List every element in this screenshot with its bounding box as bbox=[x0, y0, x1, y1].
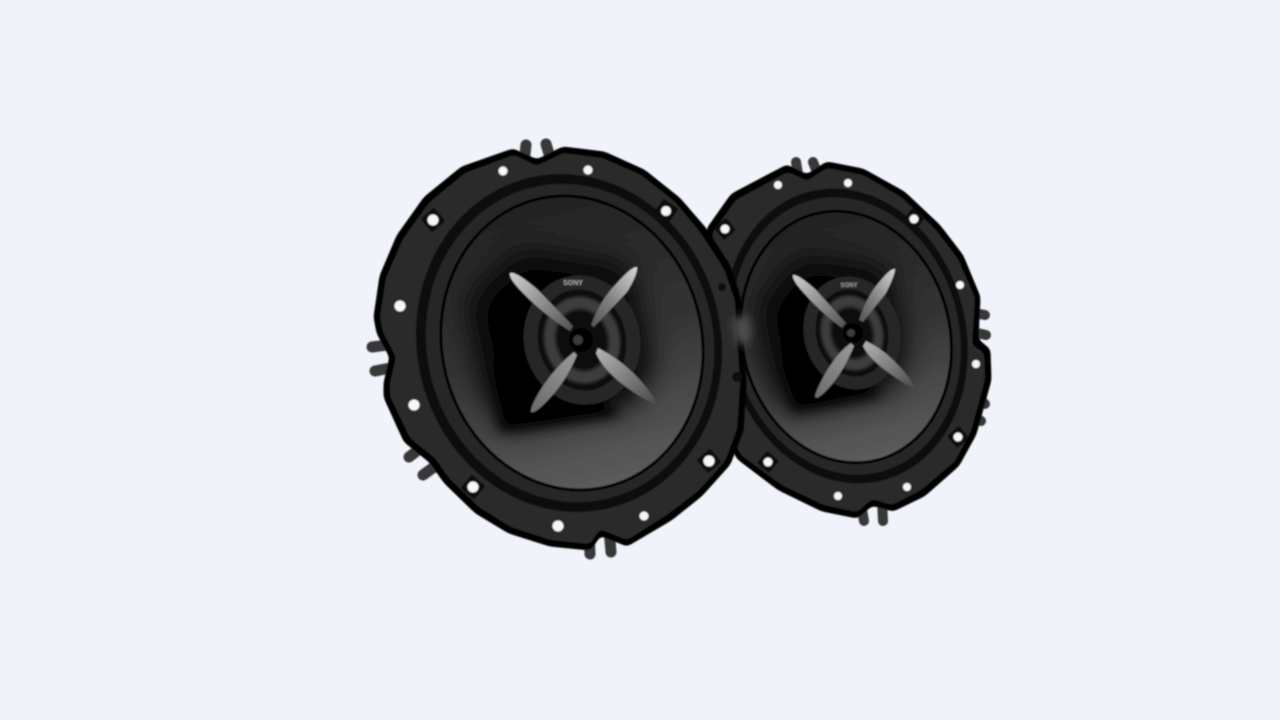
cone: left speaker bbox=[410, 168, 734, 518]
mounting holes: right speaker bbox=[720, 179, 980, 500]
cone shadow: right speaker bbox=[758, 258, 905, 412]
logo: left speaker: SONY bbox=[563, 280, 583, 287]
tweeter rings: left speaker bbox=[510, 263, 654, 417]
surround highlight: right speaker bbox=[702, 173, 990, 499]
logo: right speaker: SONY bbox=[840, 283, 858, 289]
surround: right speaker bbox=[694, 162, 998, 510]
dark rivets: left speaker bbox=[718, 283, 742, 382]
hole collars: left speaker bbox=[420, 198, 722, 500]
mounting tabs: right speaker bbox=[796, 162, 986, 521]
mounting frame rim: left speaker bbox=[375, 148, 745, 549]
cone: right speaker bbox=[714, 189, 978, 485]
hole collars: right speaker bbox=[714, 208, 969, 473]
tweeter rings: right speaker bbox=[792, 266, 912, 400]
mounting frame body: right speaker bbox=[708, 168, 985, 512]
cone shadow edge: left speaker bbox=[495, 360, 620, 432]
blades: left speaker bbox=[510, 267, 656, 412]
cone shadow: left speaker bbox=[468, 252, 652, 428]
mounting holes: left speaker bbox=[394, 166, 714, 532]
mounting frame body: left speaker bbox=[380, 153, 740, 544]
cone shadow edge: right speaker bbox=[785, 350, 880, 412]
blades: right speaker bbox=[793, 269, 914, 398]
grey patch between speakers bbox=[732, 314, 752, 346]
speaker: right (smaller) bbox=[694, 162, 998, 521]
mounting tabs: left speaker bbox=[372, 144, 611, 554]
mounting frame rim: right speaker bbox=[703, 163, 990, 517]
speaker: left (larger) bbox=[372, 141, 758, 554]
surround: left speaker bbox=[380, 141, 758, 545]
surround highlight: left speaker bbox=[393, 153, 747, 533]
